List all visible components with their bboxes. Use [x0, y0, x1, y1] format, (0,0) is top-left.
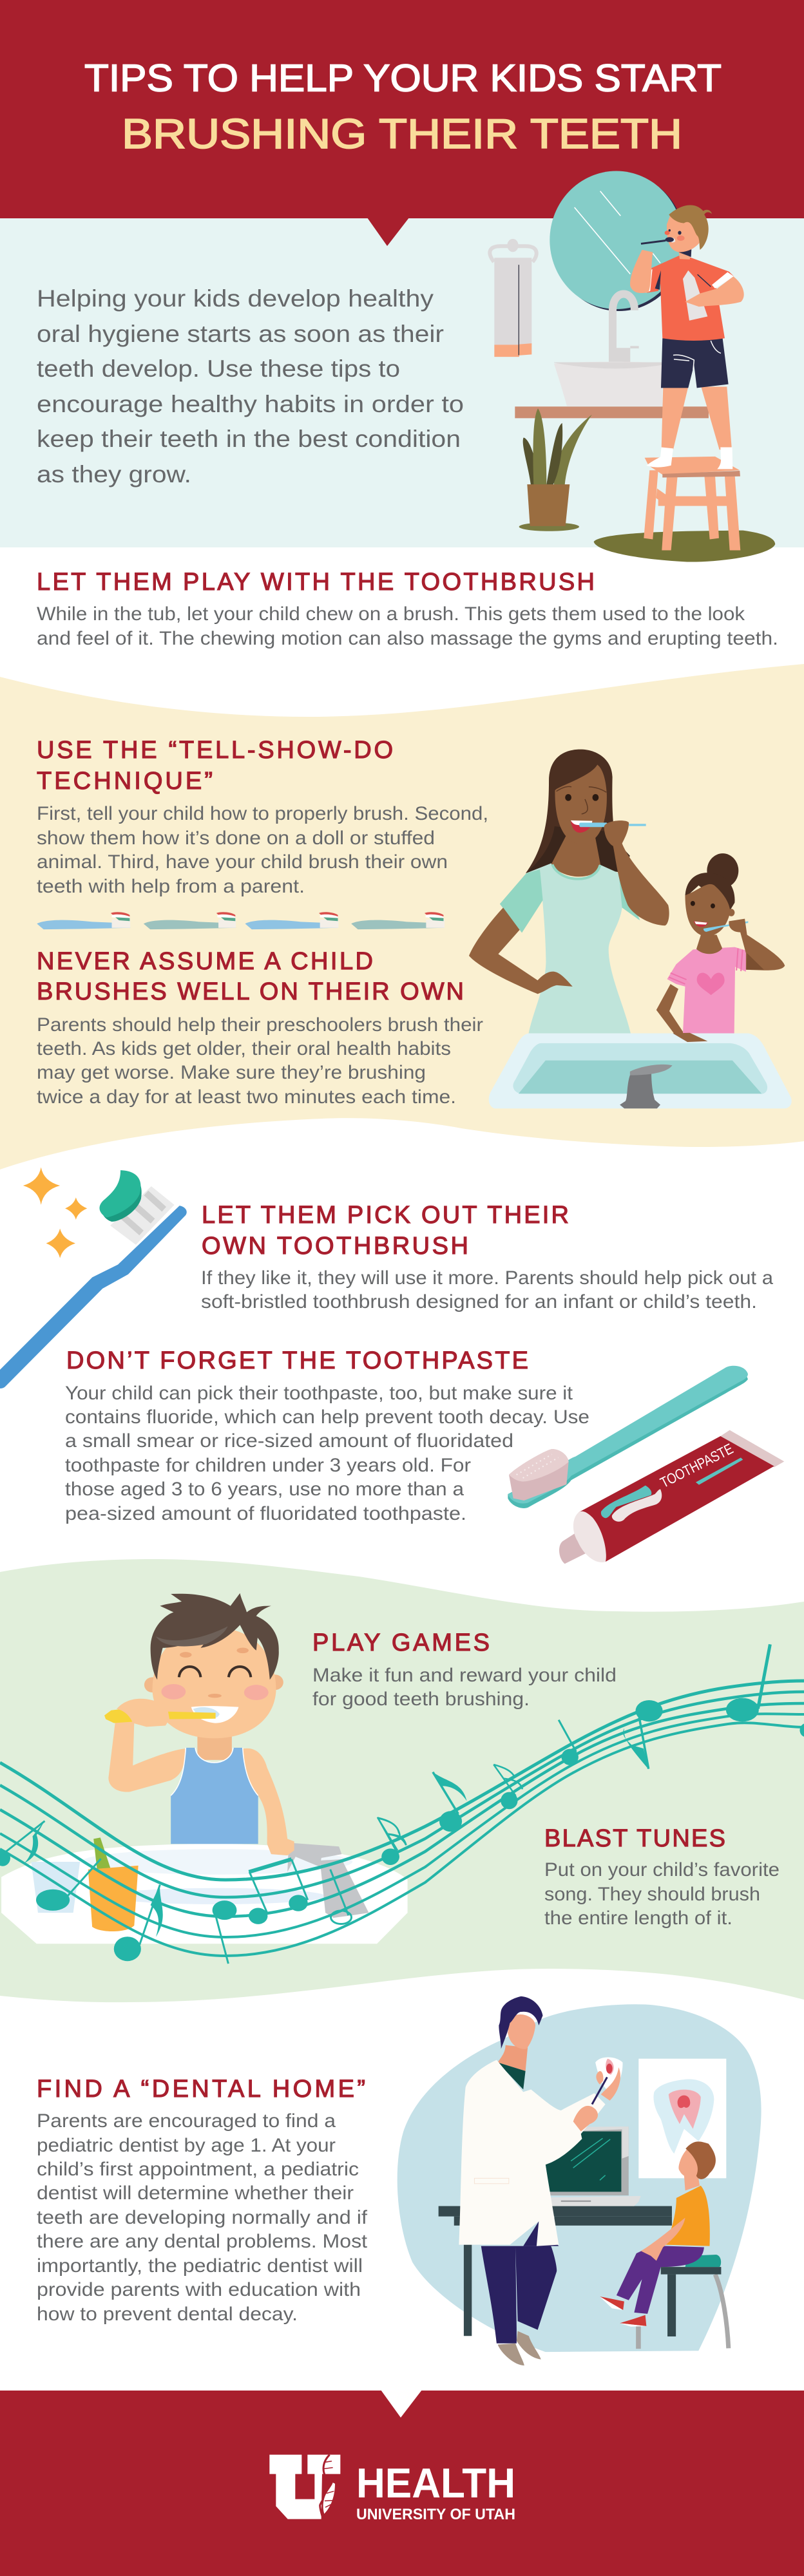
heading — [37, 948, 464, 1005]
notes right — [433, 1644, 804, 1832]
heading: FIND A “DENTAL HOME” — [37, 2076, 365, 2103]
heading: LET THEM PLAY WITH THE TOOTHBRUSH — [37, 569, 595, 596]
wordmark: HEALTH — [356, 2459, 515, 2506]
body text: those aged 3 to 6 years, use no more than a — [65, 1479, 464, 1500]
stool — [644, 457, 740, 550]
body text: Make it fun and reward your child — [312, 1665, 617, 1686]
section: play games — [312, 1629, 617, 1710]
faucet and sink — [554, 294, 662, 406]
notes left — [0, 1817, 407, 1964]
body text: If they like it, they will use it more. Parents should help pick out a — [201, 1267, 773, 1289]
intro text block — [37, 285, 464, 488]
body text: dentist will determine whether their — [37, 2183, 354, 2204]
toothpaste tube: TOOTHPASTE — [657, 1440, 736, 1491]
body text: provide parents with education with — [37, 2279, 361, 2300]
heading: PLAY GAMES — [312, 1629, 490, 1656]
illustration: mother and daughter brushing at sink — [469, 750, 792, 1108]
section: don't forget the toothpaste — [65, 1347, 589, 1524]
child — [600, 2141, 716, 2327]
music staff with notes — [0, 1644, 804, 1964]
panel: header banner — [0, 0, 804, 246]
body text: a small smear or rice-sized amount of fluoridated — [65, 1430, 513, 1452]
body text — [312, 1665, 617, 1710]
body text: teeth are developing normally and if — [37, 2207, 368, 2228]
body text: how to prevent dental decay. — [37, 2304, 298, 2325]
illustration: blue toothbrush with sparkles — [0, 1168, 187, 1388]
heading: BLAST TUNES — [544, 1825, 725, 1852]
sparkles — [23, 1168, 87, 1258]
heading — [202, 1202, 569, 1260]
body text: teeth. As kids get older, their oral health habits — [37, 1038, 451, 1059]
illustration: boy brushing at bathroom mirror — [490, 171, 775, 562]
body text — [544, 1859, 780, 1929]
potted plant — [519, 408, 592, 531]
body text: teeth with help from a parent. — [37, 876, 305, 897]
body text — [201, 1267, 773, 1312]
title: TIPS TO HELP YOUR KIDS START — [84, 57, 722, 99]
body text: animal. Third, have your child brush their own — [37, 851, 448, 873]
body text: Parents should help their preschoolers brush their — [37, 1014, 483, 1036]
toothbrush — [508, 1366, 748, 1508]
body text: twice a day for at least two minutes each time. — [37, 1086, 456, 1108]
divider: row of mini toothbrushes — [37, 912, 445, 929]
intro text block: encourage healthy habits in order to — [37, 391, 464, 417]
heading: NEVER ASSUME A CHILD — [37, 948, 373, 975]
body text: While in the tub, let your child chew on a brush. This gets them used to the look — [37, 603, 745, 625]
wordmark: UNIVERSITY OF UTAH — [356, 2506, 515, 2523]
towel on ring — [490, 239, 537, 357]
body text: contains fluoride, which can help prevent tooth decay. Use — [65, 1406, 589, 1428]
title: BRUSHING THEIR TEETH — [122, 110, 682, 157]
logo: University of Utah Health — [269, 2455, 515, 2523]
panel: footer banner — [0, 2390, 804, 2576]
body text: for good teeth brushing. — [312, 1689, 530, 1710]
body text: First, tell your child how to properly brush. Second, — [37, 803, 488, 824]
block U with DNA helix — [269, 2455, 340, 2519]
body text — [37, 803, 488, 897]
staff lines — [0, 1681, 804, 1956]
body text: and feel of it. The chewing motion can also massage the gyms and erupting teeth. — [37, 628, 778, 649]
body text: pea-sized amount of fluoridated toothpaste. — [65, 1503, 466, 1524]
body text — [37, 1014, 483, 1108]
mirror — [550, 171, 685, 311]
stool — [636, 2255, 729, 2349]
body text: Your child can pick their toothpaste, too, but make sure it — [65, 1383, 573, 1404]
daughter — [656, 853, 785, 1034]
toothpaste tube — [559, 1430, 784, 1564]
body text: Put on your child’s favorite — [544, 1859, 780, 1880]
section: let them play with the toothbrush — [37, 569, 778, 649]
panel: cream wave section — [0, 664, 804, 1170]
section: tell-show-do technique — [37, 737, 488, 897]
body text — [37, 2110, 368, 2325]
body text: the entire length of it. — [544, 1908, 732, 1929]
heading: OWN TOOTHBRUSH — [202, 1233, 468, 1260]
body text — [65, 1383, 589, 1524]
title — [84, 57, 722, 157]
illustration: teal toothbrush and toothpaste tube — [508, 1366, 784, 1564]
tooth poster — [638, 2059, 726, 2178]
heading: BRUSHES WELL ON THEIR OWN — [37, 978, 464, 1005]
body text: song. They should brush — [544, 1884, 760, 1905]
body text: child’s first appointment, a pediatric — [37, 2159, 359, 2180]
heading — [37, 737, 393, 795]
white sink, cup and glass — [1, 1837, 408, 1944]
mother — [469, 750, 669, 1034]
intro text block: teeth develop. Use these tips to — [37, 355, 400, 382]
body text: may get worse. Make sure they’re brushing — [37, 1062, 426, 1083]
section: let them pick out their own toothbrush — [201, 1202, 773, 1312]
body text: there are any dental problems. Most — [37, 2231, 368, 2252]
counter — [515, 406, 709, 418]
heading: DON’T FORGET THE TOOTHPASTE — [66, 1347, 528, 1374]
sink — [489, 1033, 792, 1108]
body text: importantly, the pediatric dentist will — [37, 2255, 363, 2277]
boy — [630, 205, 744, 469]
floor rug — [594, 531, 775, 562]
body text: toothpaste for children under 3 years old. For — [65, 1455, 471, 1476]
boy — [104, 1593, 294, 1855]
body text: pediatric dentist by age 1. At your — [37, 2135, 336, 2156]
panel: intro background — [0, 218, 804, 547]
intro text block: Helping your kids develop healthy — [37, 285, 434, 312]
note far left upper — [378, 1818, 406, 1865]
illustration: dentist showing tooth to child — [397, 1996, 761, 2365]
intro text block: keep their teeth in the best condition — [37, 426, 461, 452]
desk and laptop — [439, 2126, 672, 2336]
heading: USE THE “TELL-SHOW-DO — [37, 737, 393, 764]
body text: soft-bristled toothbrush designed for an infant or child’s teeth. — [201, 1291, 757, 1312]
section: find a dental home — [37, 2076, 368, 2325]
heading: TECHNIQUE” — [37, 768, 213, 795]
illustration: boy brushing at white sink — [1, 1593, 408, 1944]
heading: LET THEM PICK OUT THEIR — [202, 1202, 569, 1229]
background blob — [397, 2004, 761, 2352]
section: never assume a child brushes well — [37, 948, 483, 1108]
body text: Parents are encouraged to find a — [37, 2110, 336, 2132]
dentist — [459, 1996, 623, 2365]
body text: show them how it’s done on a doll or stuffed — [37, 828, 435, 849]
section: blast tunes — [544, 1825, 780, 1929]
panel: green wave section — [0, 1559, 804, 2002]
intro text block: oral hygiene starts as soon as their — [37, 321, 444, 347]
body text — [37, 603, 778, 649]
intro text block: as they grow. — [37, 461, 191, 488]
